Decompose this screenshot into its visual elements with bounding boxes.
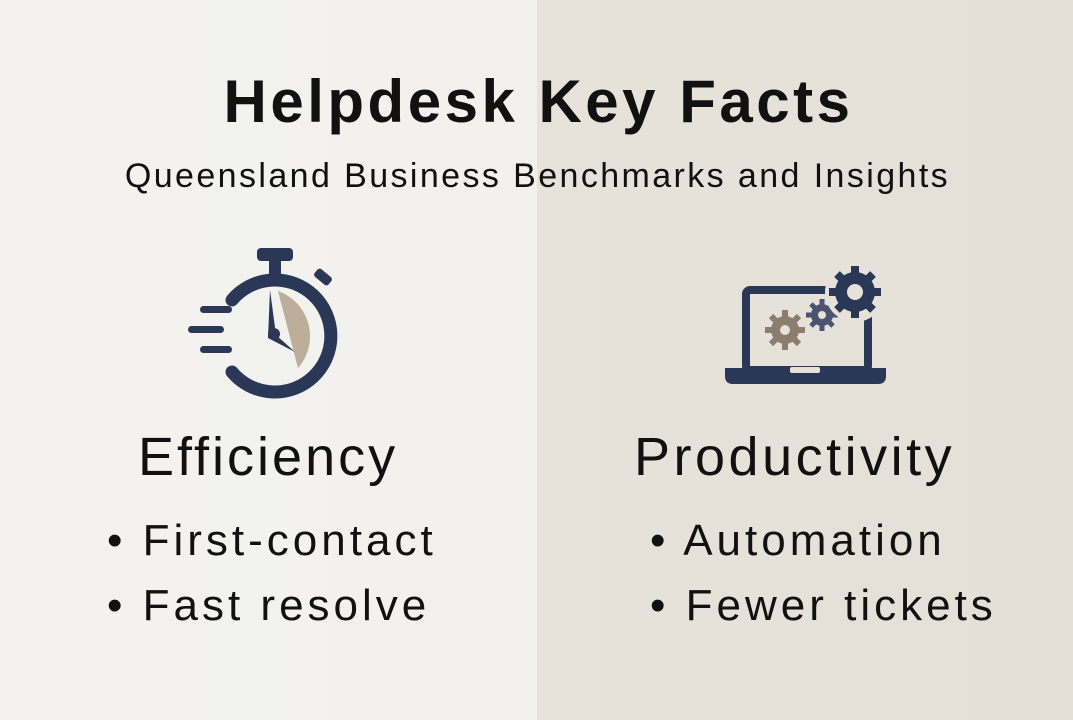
- icon: stopwatch: [188, 248, 338, 398]
- title: Helpdesk Key Facts: [224, 68, 853, 135]
- list: efficiency bullets: • Fast resolve: [107, 581, 430, 630]
- list: efficiency bullets: [107, 516, 437, 630]
- list: productivity bullets: • Automation: [650, 516, 946, 565]
- heading: Productivity: Productivity: [634, 427, 955, 487]
- icon: laptop with gears: [725, 266, 886, 384]
- heading: Efficiency: Efficiency: [138, 427, 398, 487]
- list: efficiency bullets: • First-contact: [107, 516, 437, 565]
- list: productivity bullets: [650, 516, 997, 630]
- subtitle: Queensland Business Benchmarks and Insights: [125, 157, 950, 195]
- list: productivity bullets: • Fewer tickets: [650, 581, 997, 630]
